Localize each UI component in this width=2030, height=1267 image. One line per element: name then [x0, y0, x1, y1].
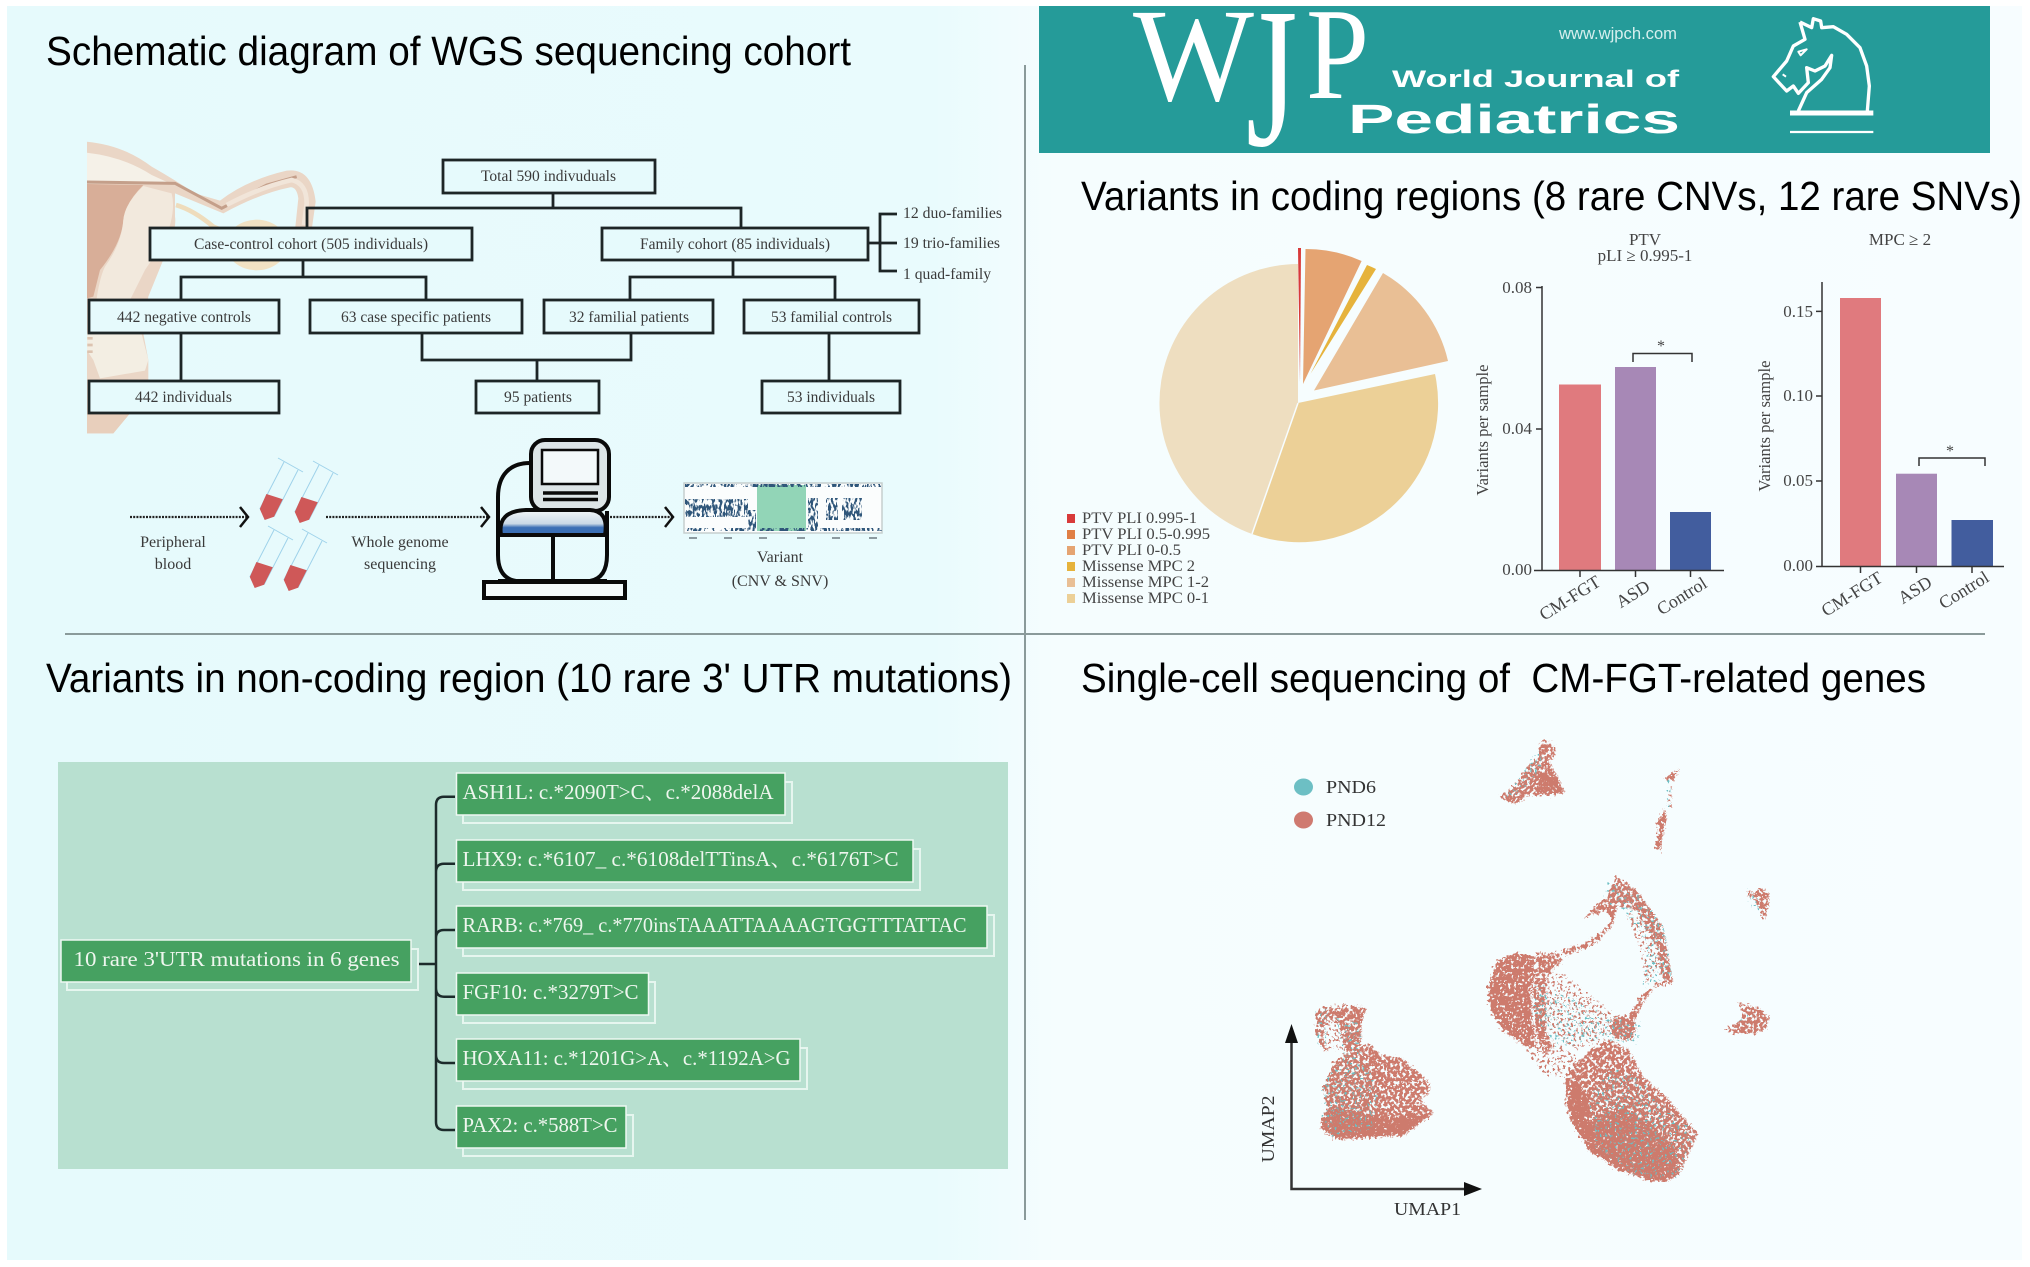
chart title: PTV: [1629, 230, 1662, 249]
axes: [1534, 286, 1724, 577]
pie chart: variant classes: [1159, 248, 1448, 542]
axis label: UMAP1: UMAP1: [1394, 1199, 1461, 1219]
node: HOXA11: [456, 1039, 807, 1089]
legend: pie classes: Missense MPC 1-2: [1082, 574, 1209, 591]
node: ASH1L: [456, 773, 792, 823]
node: root: 10 rare 3'UTR mutations in 6 genes: [74, 947, 400, 971]
x tick labels: ASD: [1612, 576, 1653, 612]
legend: pie classes: PTV PLI 0.995-1: [1082, 510, 1197, 527]
bars: [1840, 298, 1993, 566]
arrow: to blood tubes: [130, 507, 248, 527]
node: HOXA11: HOXA11: c.*1201G>A、c.*1192A>G: [462, 1046, 790, 1070]
axis label: UMAP2: UMAP2: [1258, 1096, 1278, 1162]
node: PAX2: PAX2: c.*588T>C: [462, 1113, 618, 1137]
box: familial patients: [544, 300, 713, 333]
text: variant CNV and SNV: (CNV & SNV): [732, 573, 828, 590]
text: family types: 19 trio-families: [903, 235, 1000, 252]
text: peripheral blood: [140, 534, 206, 573]
text: peripheral blood: blood: [155, 556, 191, 573]
text: website: www.wjpch.com: [1558, 24, 1677, 43]
bars: [1559, 367, 1711, 570]
y tick labels: [1502, 278, 1532, 579]
node: FGF10: [456, 973, 655, 1023]
bar chart: PTV: [1473, 230, 1724, 624]
x tick labels: Control: [1935, 567, 1992, 613]
text: variant CNV and SNV: [732, 549, 828, 590]
y tick labels: 0.00: [1783, 556, 1813, 575]
workflow: blood to variant: [130, 440, 882, 598]
logo: WJP letters: [1133, 0, 1369, 189]
icon: blood tubes: [250, 458, 338, 591]
legend: PND groups: PND12: [1326, 810, 1386, 830]
box: negative controls: [89, 300, 279, 333]
heading: single-cell: Single-cell sequencing of CM-FGT-related genes: [1081, 655, 1926, 701]
node: ASH1L: ASH1L: c.*2090T>C、c.*2088delA: [462, 780, 774, 804]
legend: PND groups: [1294, 777, 1386, 830]
box: total: [443, 160, 655, 193]
node: LHX9: [456, 840, 920, 890]
significance bracket: [1633, 338, 1692, 362]
chart title: [1598, 230, 1692, 265]
significance bracket: *: [1946, 443, 1954, 460]
x tick labels: ASD: [1894, 572, 1935, 608]
flow chart: cohort hierarchy: [89, 160, 1002, 413]
x tick labels: [1536, 571, 1710, 624]
legend: pie classes: PTV PLI 0.5-0.995: [1082, 526, 1210, 543]
y tick labels: 0.10: [1783, 386, 1813, 405]
box: negative controls: 442 negative controls: [117, 309, 251, 326]
chart title: MPC ≥ 2: [1869, 230, 1931, 249]
box: familial controls: 53 familial controls: [771, 309, 892, 326]
text: peripheral blood: Peripheral: [140, 534, 206, 551]
y axis label: Variants per sample: [1473, 364, 1492, 496]
text: family types: 12 duo-families: [903, 205, 1002, 222]
x tick labels: Control: [1653, 573, 1710, 619]
legend: pie classes: PTV PLI 0-0.5: [1082, 542, 1181, 559]
box: case-control cohort: Case-control cohort (505 individuals): [194, 236, 428, 253]
chart title: pLI ≥ 0.995-1: [1598, 246, 1692, 265]
arrow: to sequencer: [326, 507, 489, 527]
x tick labels: CM-FGT: [1818, 567, 1886, 620]
text: whole genome sequencing: Whole genome: [351, 534, 449, 551]
box: 95 patients: [476, 381, 599, 413]
text: family types: [903, 205, 1002, 283]
x tick labels: [1818, 567, 1992, 620]
box: case specific patients: 63 case specific patients: [341, 309, 491, 326]
box: total: Total 590 indivuduals: [481, 168, 616, 185]
text: whole genome sequencing: [351, 534, 449, 573]
box: 95 patients: 95 patients: [504, 389, 572, 406]
legend: pie classes: Missense MPC 0-1: [1082, 590, 1209, 607]
significance bracket: [1919, 443, 1985, 466]
journal banner: [1039, 0, 1990, 189]
box: family cohort: Family cohort (85 individuals): [640, 236, 830, 253]
heading: schematic diagram: Schematic diagram of WGS sequencing cohort: [46, 28, 852, 74]
significance bracket: *: [1657, 338, 1665, 355]
text: variant CNV and SNV: Variant: [757, 549, 804, 566]
icon: chess knight: [1773, 19, 1873, 132]
arrow: to variant plot: [610, 507, 673, 527]
y tick labels: 0.00: [1502, 560, 1532, 579]
node: RARB: [456, 906, 994, 956]
y tick labels: [1783, 302, 1813, 575]
y tick labels: 0.15: [1783, 302, 1813, 321]
node: LHX9: LHX9: c.*6107_ c.*6108delTTinsA、c.*6176T>C: [462, 847, 898, 871]
node: root: [61, 940, 418, 990]
connectors: [181, 193, 897, 381]
legend: pie classes: Missense MPC 2: [1082, 558, 1195, 575]
box: 442 individuals: [89, 381, 279, 413]
y tick labels: 0.08: [1502, 278, 1532, 297]
box: family cohort: [602, 228, 868, 260]
node: PAX2: [456, 1106, 633, 1156]
text: family types: 1 quad-family: [903, 266, 991, 283]
legend: pie classes: [1067, 510, 1210, 607]
box: case-control cohort: [150, 228, 472, 260]
node: FGF10: FGF10: c.*3279T>C: [462, 980, 638, 1004]
text: journal name: World Journal of: [1392, 66, 1681, 93]
box: 53 individuals: 53 individuals: [787, 389, 875, 406]
bar chart: MPC: [1755, 230, 2004, 620]
box: 53 individuals: [762, 381, 900, 413]
box: familial controls: [744, 300, 919, 333]
text: journal name: [1348, 66, 1681, 142]
panel: non-coding variants: [46, 655, 1012, 1169]
node: RARB: RARB: c.*769_ c.*770insTAAATTAAAAGTGGTTTATTAC: [462, 913, 966, 937]
chart: variant track: [684, 483, 882, 538]
box: case specific patients: [310, 300, 522, 333]
illustration: uterus anatomy: [87, 142, 316, 433]
y tick labels: 0.05: [1783, 471, 1813, 490]
axes: UMAP arrows: [1285, 1024, 1482, 1196]
box: 442 individuals: 442 individuals: [135, 389, 232, 406]
mind map connectors: [418, 797, 455, 1130]
text: whole genome sequencing: sequencing: [364, 556, 436, 573]
legend: PND groups: PND6: [1326, 777, 1376, 797]
mind map background: [58, 762, 1008, 1169]
axes: [1816, 282, 2004, 573]
y axis label: Variants per sample: [1755, 360, 1774, 492]
panel: single-cell sequencing: [1081, 655, 1926, 1219]
text: journal name: Pediatrics: [1348, 96, 1680, 142]
box: familial patients: 32 familial patients: [569, 309, 689, 326]
scatter: UMAP clusters: [1317, 741, 1770, 1182]
icon: sequencing machine: [484, 440, 625, 598]
panel: coding variants: [1067, 173, 2022, 624]
x tick labels: CM-FGT: [1536, 571, 1604, 624]
y tick labels: 0.04: [1502, 419, 1532, 438]
heading: non-coding region: Variants in non-coding region (10 rare 3' UTR mutations): [46, 655, 1012, 701]
